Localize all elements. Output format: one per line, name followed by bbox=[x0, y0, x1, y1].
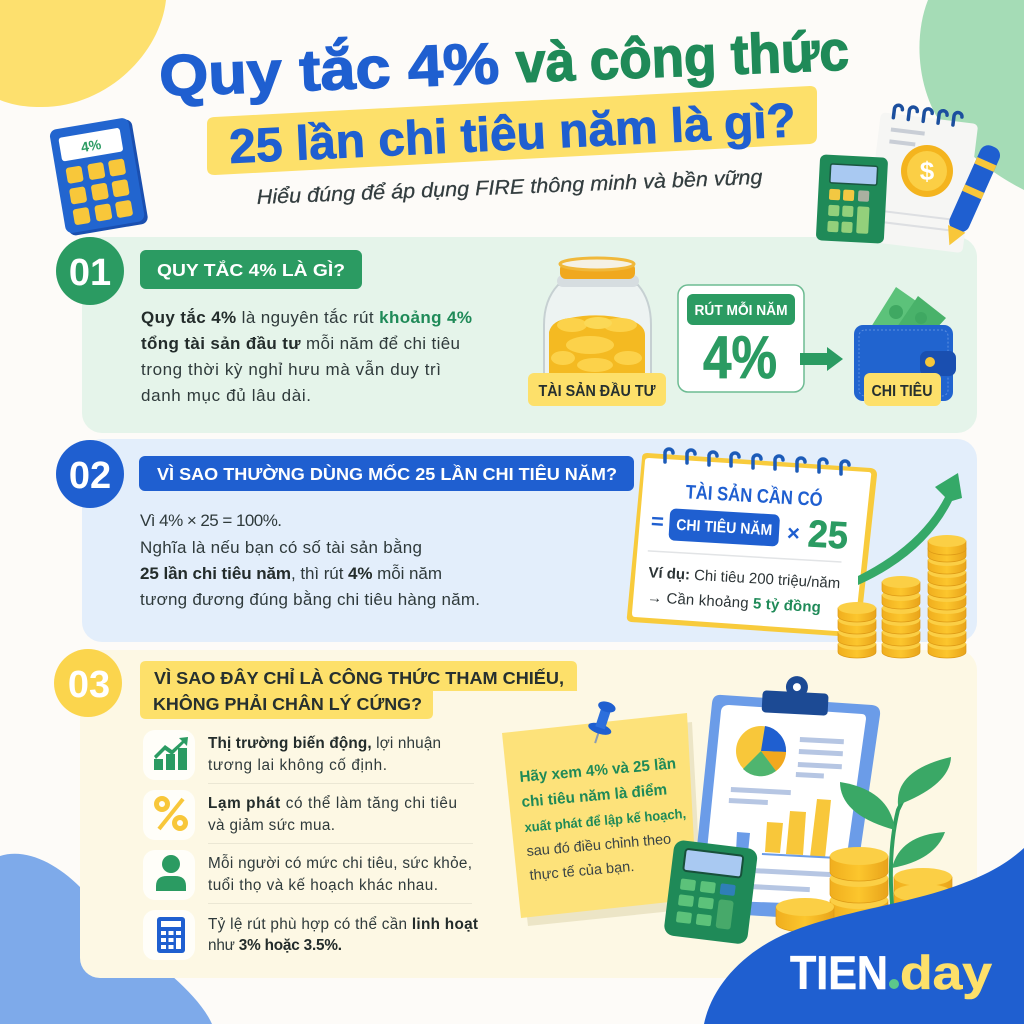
list item 2 bbox=[143, 790, 457, 840]
icon: jar of gold coins bbox=[544, 258, 651, 405]
body text 2 bbox=[140, 511, 480, 609]
green calculator bbox=[816, 154, 888, 244]
coin stacks bbox=[776, 847, 952, 932]
heading 2 bbox=[139, 456, 634, 491]
logo: TIEN.day: day bbox=[900, 946, 992, 999]
icon: blue calculator left: 4% bbox=[80, 136, 103, 155]
body text 1 bbox=[141, 308, 472, 405]
icon: wallet with banknotes bbox=[854, 287, 956, 401]
badge 01 bbox=[56, 237, 124, 305]
plant bbox=[840, 757, 951, 905]
heading 1: QUY TẮC 4% LÀ GÌ? bbox=[157, 259, 345, 280]
note text: chi tiêu năm là điểm bbox=[521, 781, 668, 811]
list item 1 bbox=[143, 730, 441, 780]
section 2 bbox=[56, 440, 966, 658]
list item 1: tương lai không cố định. bbox=[208, 757, 387, 774]
label: spending: CHI TIÊU bbox=[872, 382, 932, 400]
clipboard clip bbox=[762, 674, 829, 716]
body text 1: trong thời kỳ nghỉ hưu mà vẫn duy trì bbox=[141, 360, 441, 379]
clipboard with charts bbox=[663, 674, 952, 945]
list item 4 bbox=[143, 910, 478, 960]
icon: chart up bbox=[154, 737, 188, 770]
icon: person bbox=[156, 855, 186, 891]
heading 3 bbox=[140, 661, 577, 719]
box: withdraw per year bbox=[678, 285, 804, 392]
formula notebook: CHI TIÊU NĂM bbox=[676, 516, 773, 539]
note text: xuất phát để lập kế hoạch, bbox=[524, 806, 687, 835]
list item 3: tuổi thọ và kế hoạch khác nhau. bbox=[208, 877, 438, 894]
pen bbox=[940, 142, 1003, 250]
subtitle: Hiểu đúng để áp dụng FIRE thông minh và bền vững bbox=[256, 166, 763, 209]
arrow bbox=[800, 347, 843, 371]
badge 02 bbox=[56, 440, 124, 508]
label: spending bbox=[864, 373, 941, 406]
heading 3: VÌ SAO ĐÂY CHỈ LÀ CÔNG THỨC THAM CHIẾU, bbox=[154, 667, 564, 688]
note text: sau đó điều chỉnh theo bbox=[526, 831, 672, 860]
panel: section 2 background bbox=[82, 439, 977, 642]
growth arrow bbox=[858, 473, 962, 585]
coin stacks bbox=[838, 535, 966, 658]
formula notebook bbox=[627, 449, 877, 637]
box: withdraw per year: RÚT MỖI NĂM bbox=[694, 301, 788, 319]
icon: notebook with coin, calculator and pen bbox=[816, 103, 1003, 253]
label: assets bbox=[528, 373, 666, 406]
icon: notebook with coin, calculator and pen: $ bbox=[920, 156, 935, 186]
list item 3: Mỗi người có mức chi tiêu, sức khỏe, bbox=[208, 855, 472, 872]
section 1 bbox=[56, 237, 956, 406]
icon: pushpin bbox=[584, 698, 620, 747]
list item 2: Lạm phát có thể làm tăng chi tiêu bbox=[208, 795, 457, 812]
body text 2: 25 lần chi tiêu năm, thì rút 4% mỗi năm bbox=[140, 564, 442, 583]
title line 1 bbox=[158, 18, 850, 109]
icon: calculator bbox=[157, 917, 185, 953]
body text 2: Nghĩa là nếu bạn có số tài sản bằng bbox=[140, 538, 422, 557]
panel: section 1 background bbox=[82, 237, 977, 433]
label: assets: TÀI SẢN ĐẦU TƯ bbox=[538, 383, 656, 400]
title bbox=[158, 18, 850, 209]
title line 2: 25 lần chi tiêu năm là gì? bbox=[228, 94, 797, 174]
box: withdraw per year: 4% bbox=[703, 324, 777, 391]
note text: thực tế của bạn. bbox=[529, 859, 635, 884]
title line 1: và công thức bbox=[515, 19, 850, 94]
logo: TIEN.day: TIEN bbox=[790, 946, 888, 999]
pill: yearly spending bbox=[668, 508, 780, 547]
list item 4: như 3% hoặc 3.5%. bbox=[208, 937, 342, 954]
body text 2: tương đương đúng bằng chi tiêu hàng năm. bbox=[140, 590, 480, 609]
icon: blue calculator left bbox=[49, 117, 149, 237]
title highlight band bbox=[207, 86, 817, 175]
note text: Hãy xem 4% và 25 lần bbox=[519, 755, 677, 786]
note text bbox=[519, 755, 687, 884]
heading 3: KHÔNG PHẢI CHÂN LÝ CỨNG? bbox=[153, 693, 422, 714]
multiply 25: × bbox=[786, 520, 801, 546]
example line 2: → Cần khoảng 5 tỷ đồng bbox=[647, 589, 821, 616]
icon: percent bbox=[156, 798, 186, 829]
list item 2: và giảm sức mua. bbox=[208, 817, 335, 834]
heading 1 bbox=[140, 250, 362, 289]
heading 2: VÌ SAO THƯỜNG DÙNG MỐC 25 LẦN CHI TIÊU NĂM? bbox=[157, 463, 617, 484]
report lines bbox=[729, 737, 844, 892]
bar chart bbox=[736, 799, 838, 859]
decorative blob: blue bottom-left bbox=[0, 854, 212, 1024]
dollar coin bbox=[901, 145, 953, 197]
body text 2: Vì 4% × 25 = 100%. bbox=[140, 511, 282, 530]
body text 1: tổng tài sản đầu tư mỗi năm để chi tiêu bbox=[141, 334, 460, 353]
body text 1: Quy tắc 4% là nguyên tắc rút khoảng 4% bbox=[141, 308, 472, 327]
logo: TIEN.day bbox=[790, 946, 992, 999]
section 3 bbox=[54, 649, 1024, 1024]
body text 1: danh mục đủ lâu dài. bbox=[141, 386, 311, 405]
decorative blob: green top-right bbox=[919, 0, 1024, 190]
badge 01: 01 bbox=[69, 252, 111, 294]
equals sign: = bbox=[650, 508, 665, 534]
title line 1: Quy tắc 4% bbox=[158, 31, 500, 109]
list item 3 bbox=[143, 850, 472, 900]
panel: section 3 background bbox=[80, 650, 977, 978]
list item 4: Tỷ lệ rút phù hợp có thể cần linh hoạt bbox=[208, 916, 478, 933]
example line 1: Ví dụ: Chi tiêu 200 triệu/năm bbox=[648, 564, 841, 592]
badge 02: 02 bbox=[69, 455, 111, 497]
green calculator bbox=[663, 839, 758, 945]
list item 1: Thị trường biến động, lợi nhuận bbox=[208, 735, 441, 752]
pie chart bbox=[736, 726, 786, 776]
notebook page bbox=[865, 103, 979, 253]
notebook heading: TÀI SẢN CẦN CÓ bbox=[685, 479, 823, 511]
badge 03 bbox=[54, 649, 122, 717]
decorative blob: yellow top-left bbox=[0, 0, 166, 107]
formula notebook: 25 bbox=[807, 513, 849, 558]
notebook rings bbox=[665, 449, 849, 474]
sticky note bbox=[502, 698, 702, 926]
decorative blob: blue bottom-right bbox=[704, 848, 1024, 1024]
badge 03: 03 bbox=[68, 664, 110, 706]
